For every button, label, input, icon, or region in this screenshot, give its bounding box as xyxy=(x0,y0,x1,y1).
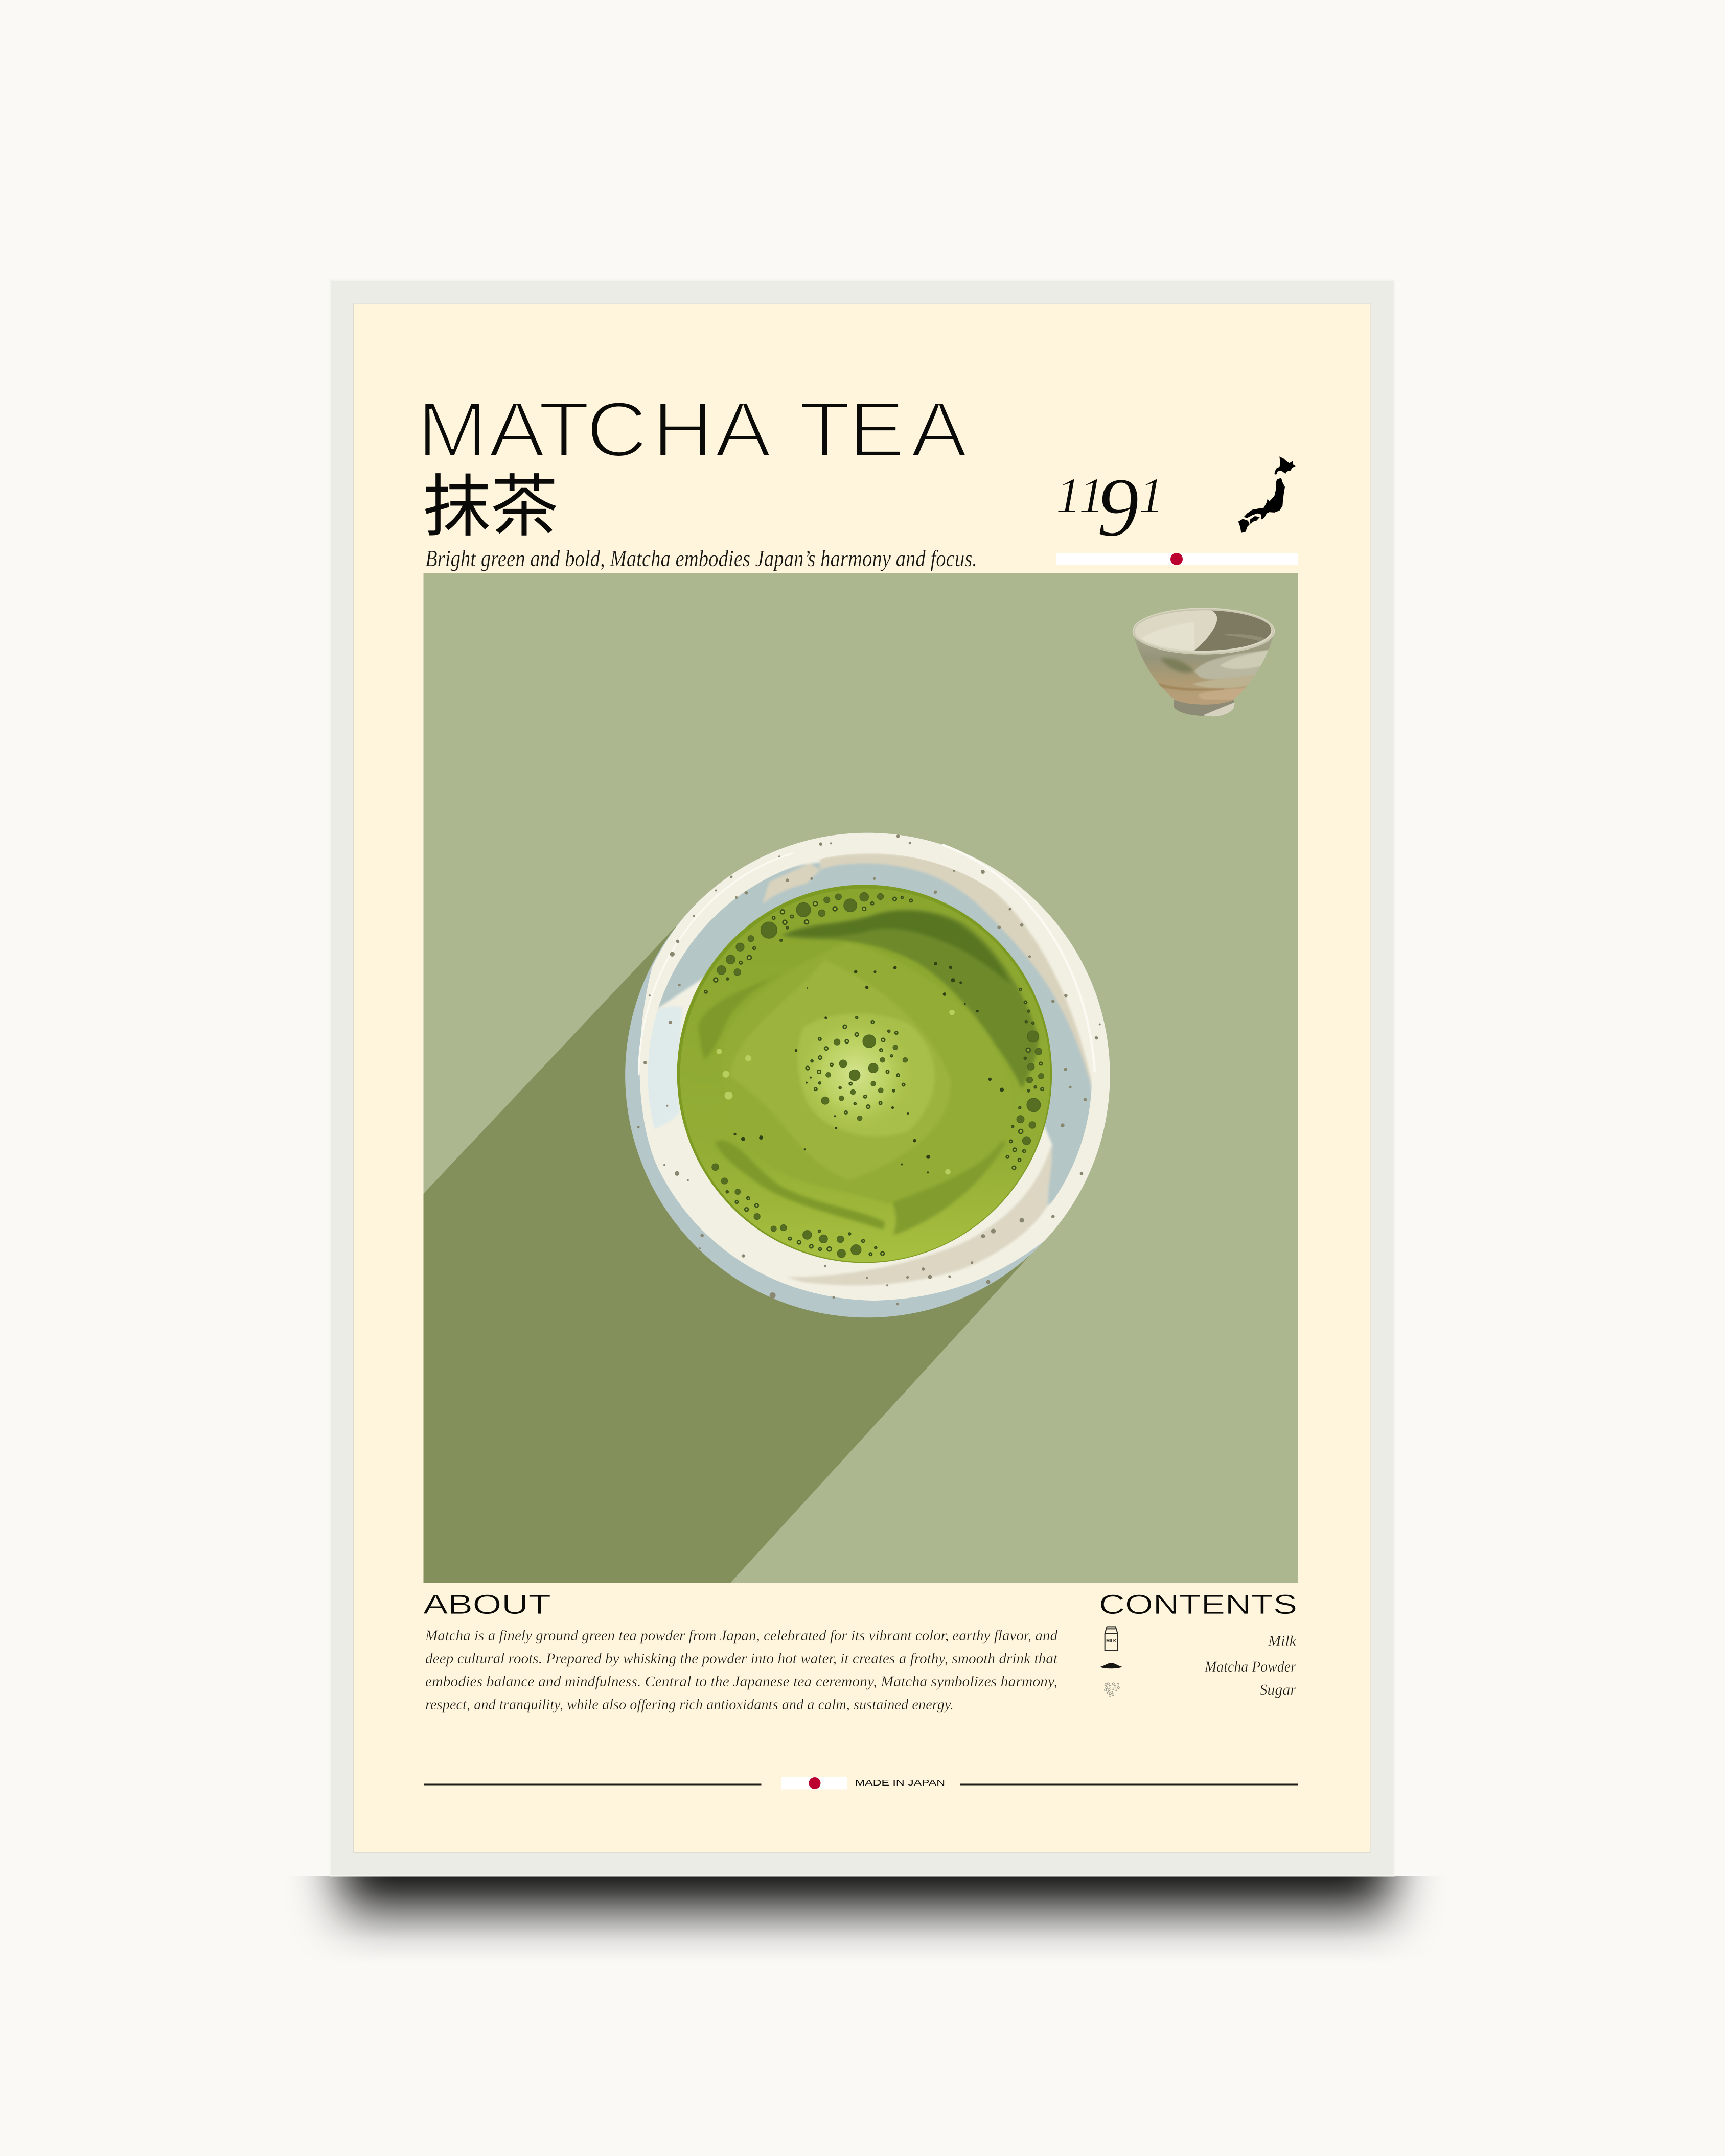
footer xyxy=(424,1777,1298,1790)
speckles xyxy=(637,834,1101,1305)
about paragraph: Matcha is a finely ground green tea powder from Japan, celebrated for its vibrant color, earthy flavor, and xyxy=(425,1627,1058,1644)
matcha surface xyxy=(677,885,1052,1263)
map of japan xyxy=(1238,456,1296,533)
label: matcha powder: Matcha Powder xyxy=(1204,1658,1296,1675)
about paragraph: respect, and tranquility, while also offering rich antioxidants and a calm, sustained energy. xyxy=(425,1696,954,1713)
contents list xyxy=(1100,1627,1297,1698)
icon: matcha powder xyxy=(1100,1663,1122,1668)
foam bubbles: scattered dots xyxy=(733,962,1004,1173)
poster paper xyxy=(354,304,1370,1852)
icon: milk carton xyxy=(1105,1627,1118,1651)
foam bubbles: small rings xyxy=(704,896,1044,1256)
white frame xyxy=(330,280,1395,1876)
floor shadow xyxy=(301,1876,1431,1954)
poster mockup xyxy=(301,281,1431,1954)
japanese title: 抹茶 xyxy=(423,469,558,544)
about paragraph: deep cultural roots. Prepared by whisking the powder into hot water, it creates a frothy, smooth drink that xyxy=(425,1650,1058,1667)
long shadow xyxy=(423,926,1033,1583)
year: 11 xyxy=(1056,468,1104,523)
year xyxy=(1056,460,1164,554)
art panel xyxy=(423,573,1298,1583)
label: sugar: Sugar xyxy=(1259,1681,1296,1698)
ceramic bowl xyxy=(625,829,1113,1317)
tagline: Bright green and bold, Matcha embodies Japan’s harmony and focus. xyxy=(425,546,977,571)
matcha bowl xyxy=(625,829,1113,1317)
footer flag xyxy=(781,1777,847,1790)
icon: sugar xyxy=(1105,1683,1119,1696)
foam bubbles: large xyxy=(712,892,1044,1258)
icon: milk carton: MILK xyxy=(1106,1639,1116,1643)
title: MATCHA TEA xyxy=(417,386,967,473)
year: 9 xyxy=(1097,460,1139,554)
contents heading: CONTENTS xyxy=(1099,1589,1297,1620)
about heading: ABOUT xyxy=(423,1589,551,1620)
year: 1 xyxy=(1139,468,1164,523)
flag bar xyxy=(1056,553,1298,565)
about paragraph xyxy=(425,1627,1058,1713)
about paragraph: embodies balance and mindfulness. Central to the Japanese tea ceremony, Matcha symbolizes harmony, xyxy=(425,1673,1057,1690)
label: milk: Milk xyxy=(1268,1633,1297,1650)
made in japan: MADE IN JAPAN xyxy=(855,1779,945,1788)
icon: small tea bowl xyxy=(1133,608,1276,716)
